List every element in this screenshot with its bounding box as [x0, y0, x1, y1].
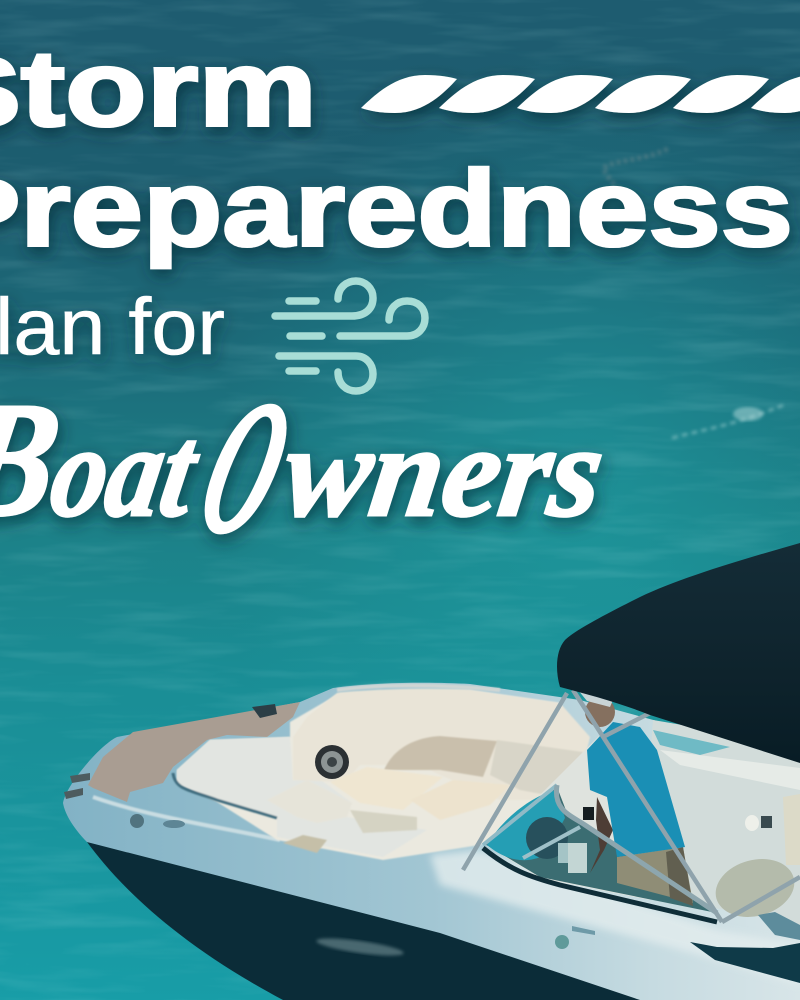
icon: wind: [275, 281, 425, 391]
canopy: [557, 543, 800, 763]
title: Boat Owners: [0, 361, 612, 572]
seat: [709, 851, 800, 925]
icon: rope: [361, 75, 800, 113]
title: Boat Owners: O: [179, 361, 312, 572]
bow and cockpit underlay: [177, 690, 600, 860]
rear cockpit: [650, 720, 800, 925]
deck fittings: [252, 704, 277, 718]
bow interior: [173, 737, 427, 857]
canopy frame: [463, 690, 800, 922]
cushions: [283, 767, 510, 853]
boat hull dark underside: [87, 842, 660, 1000]
boat hull side: [63, 683, 800, 1000]
speaker: [315, 745, 349, 779]
backrest and coaming: [293, 686, 590, 800]
person: [578, 690, 693, 906]
teak deck: [88, 702, 300, 802]
title: Boat Owners: wners: [276, 401, 612, 544]
photo: boat: [63, 543, 800, 1000]
cockpit behind windshield: [487, 735, 650, 900]
windshield frame: [483, 785, 717, 922]
hull details: [690, 942, 800, 983]
